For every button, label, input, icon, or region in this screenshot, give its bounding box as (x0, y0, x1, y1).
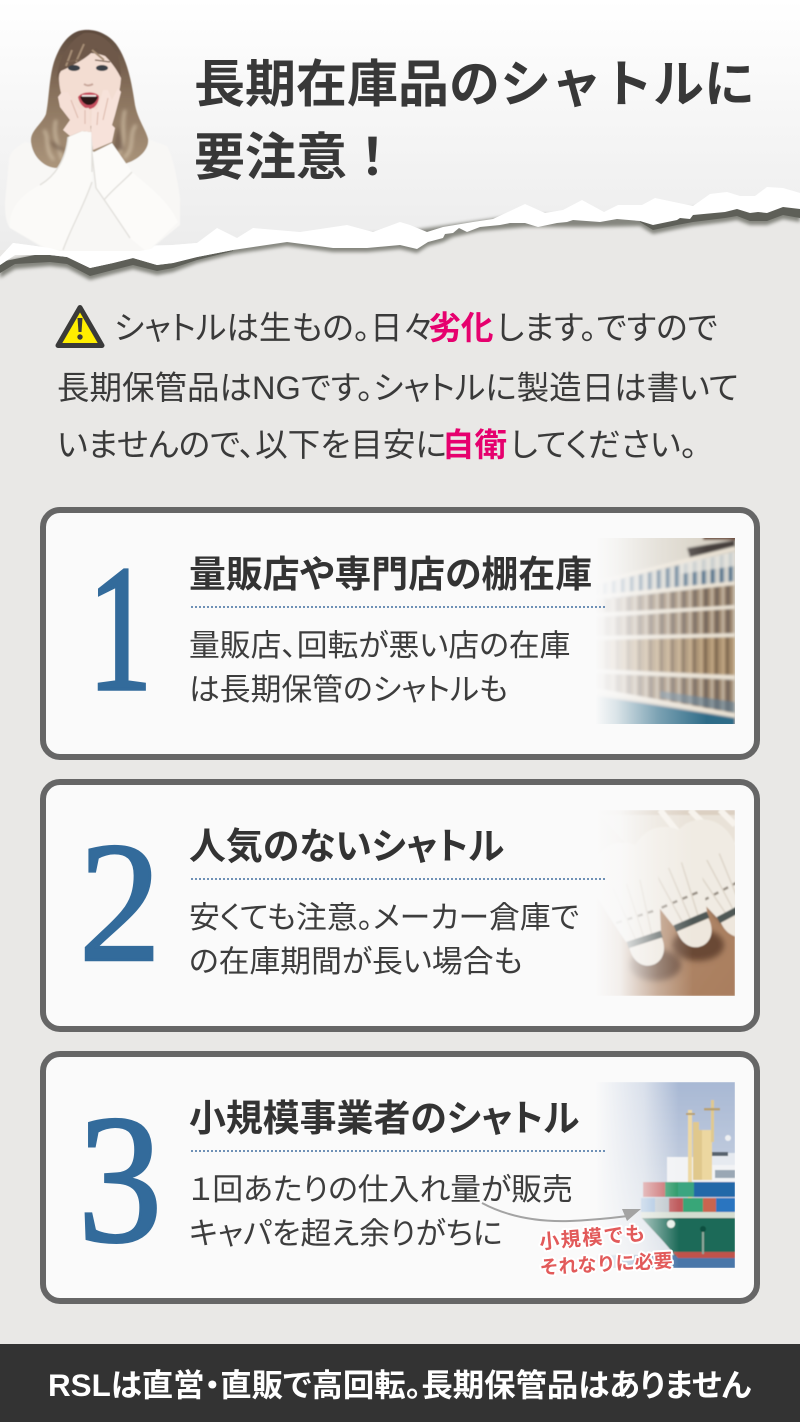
fringe (57, 33, 121, 78)
title: 要注意！ (194, 129, 398, 186)
footer text: RSLは直営・直販で高回転。長期保管品はありません (48, 1368, 751, 1403)
panel: card 2 (40, 779, 760, 1032)
right sleeve (92, 143, 178, 252)
panel: card 3 (40, 1051, 760, 1304)
sweater body (5, 140, 180, 252)
intro line 2: 長期保管品はNGです。シャトルに製造日は書いて (57, 370, 739, 406)
left hand (58, 92, 91, 136)
description 2: の在庫期間が長い場合も (189, 944, 523, 979)
paper edge over the person (0, 248, 233, 268)
description 3 (189, 1172, 573, 1251)
description 2: 安くても注意。メーカー倉庫で (189, 900, 579, 935)
intro line 1: シャトルは生もの。日々劣化します。ですので (114, 309, 718, 346)
title (194, 56, 755, 186)
photo: shuttlecocks (609, 810, 735, 996)
description 1 (189, 628, 570, 707)
number 3: 3 (78, 1078, 162, 1282)
callout: handwritten note: それなりに必要 (539, 1250, 673, 1279)
description 1: 量販店、回転が悪い店の在庫 (189, 628, 570, 663)
intro line 3: いませんので、以下を目安に自衛してください。 (57, 426, 697, 463)
face (59, 53, 121, 126)
icon: warning triangle (56, 305, 104, 348)
number 1: 1 (88, 528, 152, 728)
intro text block (56, 305, 739, 463)
heading 2: 人気のないシャトル (189, 826, 504, 867)
left sleeve (10, 131, 92, 250)
arrow: curved pointer to ship (482, 1202, 641, 1222)
heading 1: 量販店や専門店の棚在庫 (189, 554, 592, 595)
footer banner (0, 1344, 800, 1422)
description 3: １回あたりの仕入れ量が販売 (189, 1172, 573, 1207)
photo: container ship (604, 1082, 735, 1268)
photo: surprised woman (6, 29, 180, 251)
description 3: キャパを超え余りがちに (189, 1216, 503, 1251)
header background and torn paper (0, 0, 800, 282)
callout: handwritten note: 小規模でも (538, 1222, 646, 1254)
photo: store shelves (600, 538, 735, 724)
description 1: は長期保管のシャトルも (189, 672, 508, 707)
heading 3: 小規模事業者のシャトル (189, 1098, 579, 1139)
right hand (91, 88, 121, 150)
hair (31, 30, 148, 168)
title: 長期在庫品のシャトルに (194, 56, 755, 113)
callout: handwritten note (538, 1222, 674, 1279)
number 2: 2 (79, 808, 161, 998)
description 2 (189, 900, 579, 979)
panel: card 1 (40, 507, 760, 760)
